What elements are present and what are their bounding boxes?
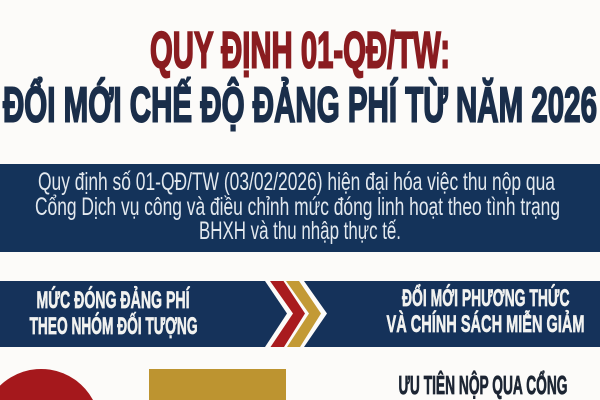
gold panel <box>149 369 286 400</box>
icon: double chevron arrow <box>270 281 321 347</box>
section bar: right <box>304 281 600 347</box>
summary text: BHXH và thu nhập thực tế. <box>199 217 401 245</box>
title <box>3 22 597 132</box>
section bar: left <box>0 281 287 347</box>
red circle <box>0 369 93 400</box>
right heading <box>386 284 584 338</box>
left heading <box>30 285 198 340</box>
summary banner <box>0 164 600 252</box>
left heading: MỨC ĐÓNG ĐẢNG PHÍ <box>36 285 190 314</box>
left heading: THEO NHÓM ĐỐI TƯỢNG <box>30 312 198 340</box>
summary text <box>35 168 560 245</box>
